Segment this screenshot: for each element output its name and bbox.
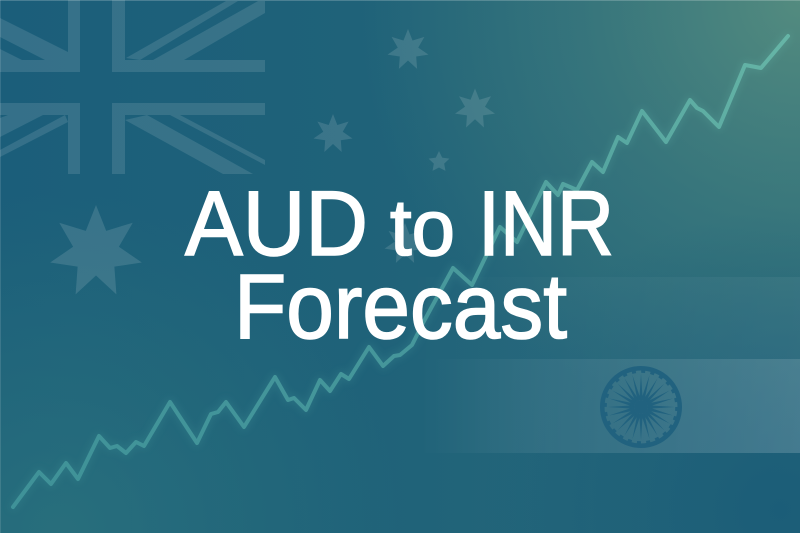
Southern Cross stars watermark <box>314 29 495 263</box>
title: to <box>390 183 455 272</box>
Commonwealth star watermark <box>50 205 142 294</box>
title: AUD <box>185 173 368 275</box>
Indian flag bands watermark <box>400 277 800 453</box>
title: Forecast <box>234 256 567 358</box>
title: INR <box>478 173 614 275</box>
title <box>185 173 614 358</box>
icon: Ashoka Chakra <box>600 366 682 448</box>
Union Jack flag watermark <box>0 0 265 174</box>
